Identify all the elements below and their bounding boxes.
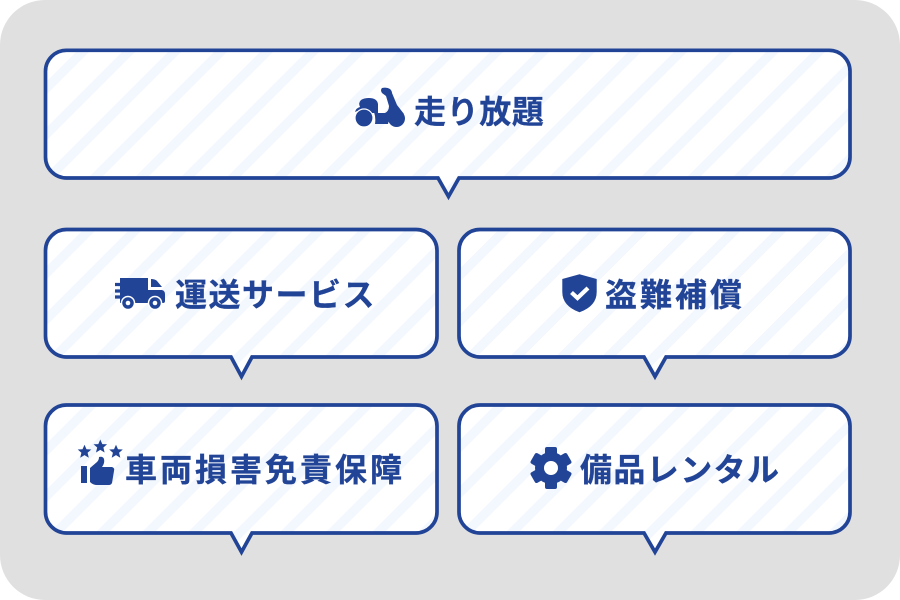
icon: gear	[530, 447, 572, 489]
label: 備品レンタル: 備品レンタル	[580, 452, 780, 488]
label: 盗難補償: 盗難補償	[605, 277, 745, 313]
icon: shield with check	[562, 274, 597, 312]
label: 車両損害免責保障: 車両損害免責保障	[125, 452, 405, 488]
bubble: 走り放題	[46, 50, 850, 196]
label: 運送サービス: 運送サービス	[175, 277, 376, 313]
label: 走り放題: 走り放題	[414, 94, 544, 130]
bubble: 備品レンタル	[459, 405, 850, 552]
bubble: 運送サービス	[46, 230, 437, 376]
bubble: 盗難補償	[459, 230, 850, 376]
icon: thumbs up with stars	[78, 440, 123, 485]
icon: delivery truck	[115, 278, 165, 310]
bubble: 車両損害免責保障	[46, 405, 437, 552]
icon: scooter	[355, 88, 405, 127]
